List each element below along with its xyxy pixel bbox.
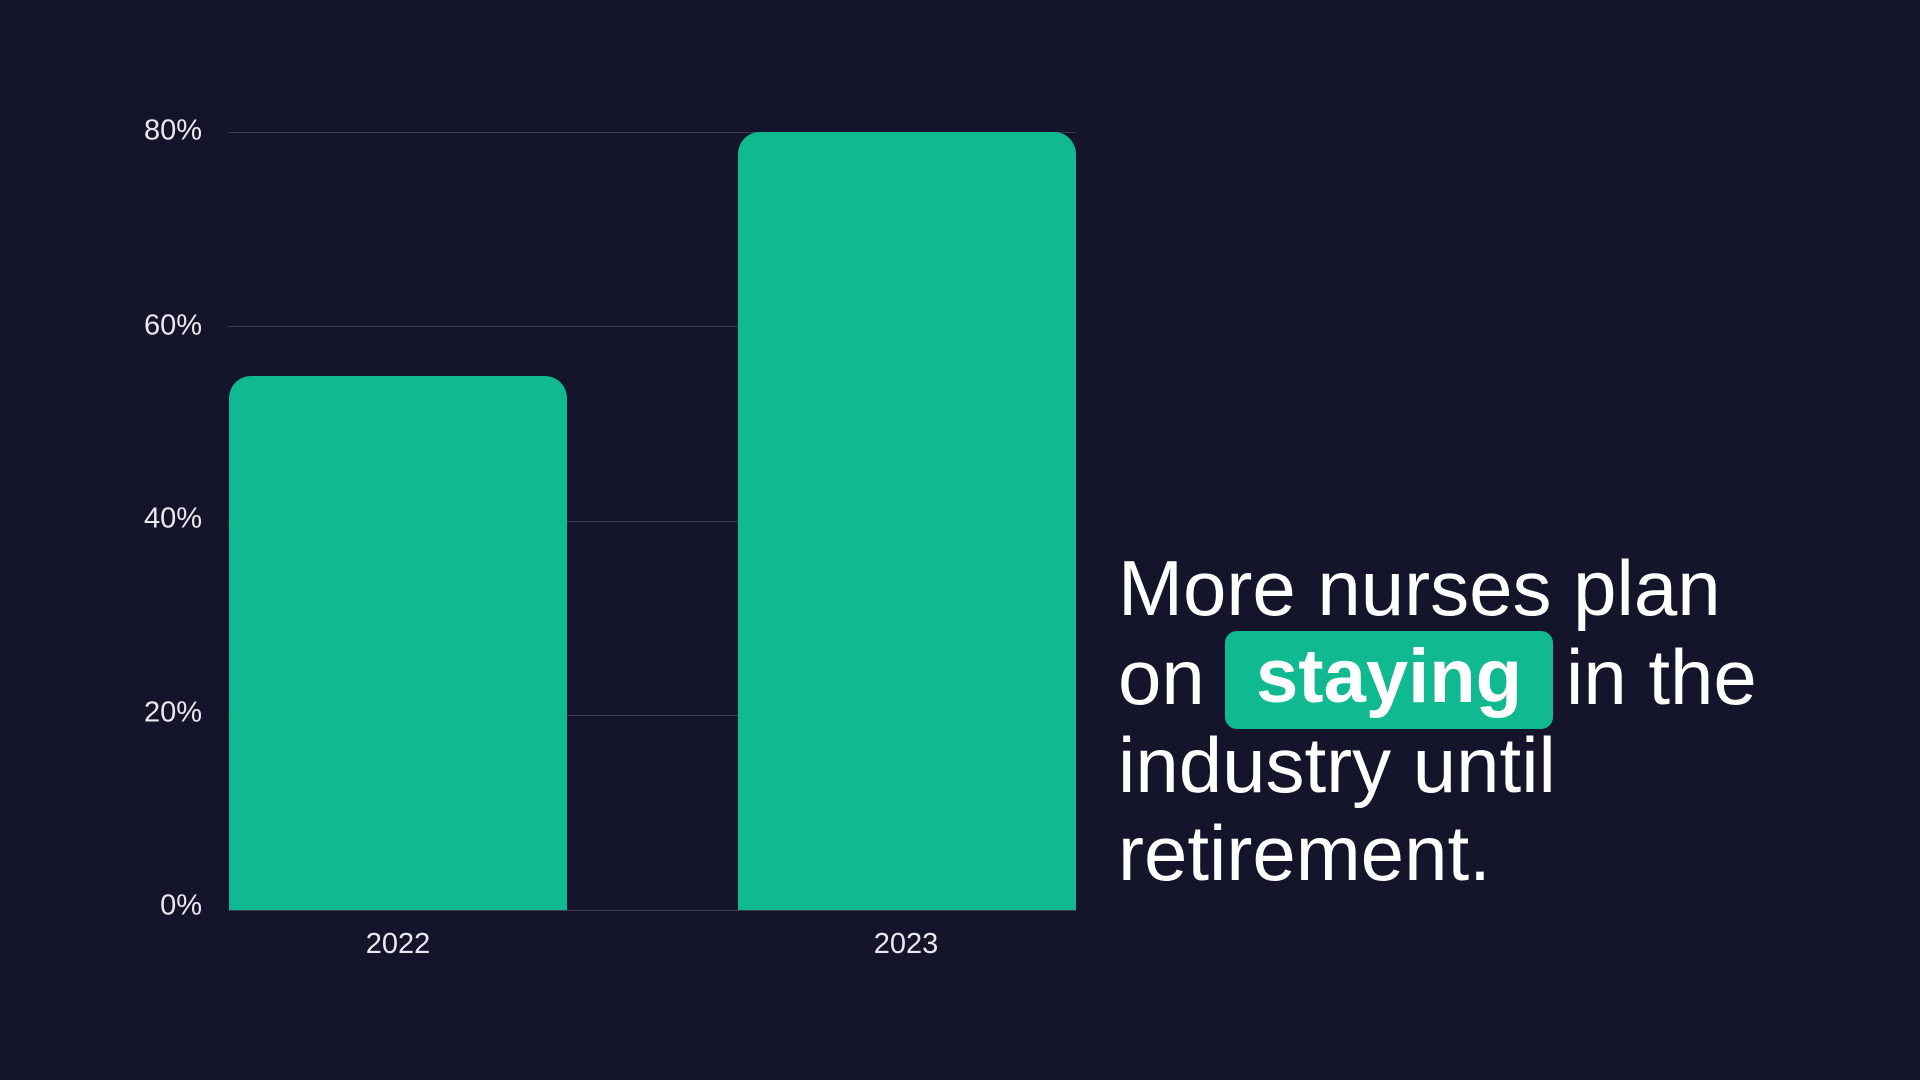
y-axis labels: 20%: [144, 696, 202, 728]
headline text: More nurses plan: [1118, 544, 1721, 632]
x-axis labels: 2023: [874, 928, 938, 960]
y-axis labels: 0%: [160, 890, 202, 922]
bar chart: [228, 132, 1076, 911]
bar: 2023: [738, 132, 1076, 910]
headline text: industry until: [1118, 721, 1556, 809]
headline text: [1118, 544, 1757, 897]
headline text: in the: [1566, 633, 1757, 721]
y-axis labels: 40%: [144, 502, 202, 534]
headline text: retirement.: [1118, 809, 1491, 897]
x-axis labels: 2022: [366, 928, 430, 960]
y-axis labels: 80%: [144, 114, 202, 146]
y-axis labels: 60%: [144, 310, 202, 342]
highlight: staying: [1225, 631, 1553, 729]
y-axis labels: [144, 114, 202, 922]
headline text: on: [1118, 633, 1205, 721]
headline text: staying: [1256, 634, 1522, 719]
x-axis labels: [366, 928, 938, 960]
bar: 2022: [229, 376, 567, 910]
